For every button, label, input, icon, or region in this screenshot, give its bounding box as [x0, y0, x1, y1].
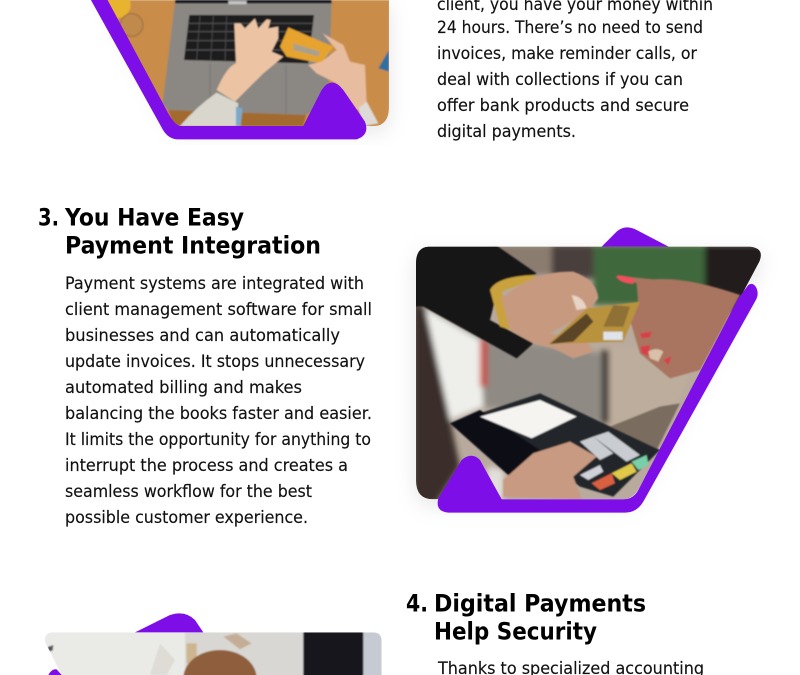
text block: section 3 paragraph: possible customer experience. [65, 508, 308, 527]
text block: section 3 paragraph: seamless workflow for the best [65, 482, 313, 501]
heading: section 3: Payment Integration [65, 232, 321, 260]
text block: section 3 paragraph: update invoices. It stops unnecessary [65, 352, 365, 371]
panel: card payment photo [413, 227, 767, 513]
panel: top right paragraph: digital payments. [437, 122, 576, 141]
text block: section 3 paragraph: It limits the opportunity for anything to [65, 430, 371, 449]
purple frame: card photo [438, 284, 758, 513]
heading: section 4: Digital Payments [434, 590, 646, 618]
panel: top laptop photo [83, 0, 393, 139]
panel: top right paragraph: 24 hours. There’s no need to send [437, 18, 703, 37]
heading: section 4: Help Security [434, 618, 597, 646]
text block: section 3 paragraph: automated billing and makes [65, 378, 302, 397]
heading: section 3 [38, 204, 321, 260]
photo: curly-haired person in a bright room [43, 630, 383, 675]
soft shadow: card photo [416, 247, 761, 499]
heading: section 3: 3. [38, 204, 59, 232]
purple accent: lower left corner [48, 669, 62, 675]
panel: top right paragraph: deal with collections if you can [437, 70, 683, 89]
purple triangle: top accent [135, 613, 203, 632]
panel: top right paragraph: invoices, make reminder calls, or [437, 44, 697, 63]
photo: hands on laptop [108, 0, 389, 126]
text block: section 3 paragraph: balancing the books faster and easier. [65, 404, 372, 423]
panel: top right paragraph [437, 0, 713, 141]
text block: section 3 paragraph [65, 274, 372, 527]
heading: section 4: 4. [406, 590, 428, 618]
heading: section 4 [406, 590, 646, 646]
photo: card handed over a terminal [413, 243, 767, 503]
soft shadow: top photo [107, 0, 389, 126]
purple frame: top photo [90, 0, 366, 139]
text block: section 3 paragraph: Payment systems are integrated with [65, 274, 364, 293]
text block: section 3 paragraph: client management software for small [65, 300, 372, 319]
purple triangle: top accent [600, 227, 670, 248]
panel: bottom photo [43, 613, 383, 675]
text block: section 3 paragraph: interrupt the process and creates a [65, 456, 348, 475]
text block: section 3 paragraph: businesses and can automatically [65, 326, 340, 345]
panel: top right paragraph: offer bank products and secure [437, 96, 689, 115]
heading: section 3: You Have Easy [64, 204, 244, 232]
